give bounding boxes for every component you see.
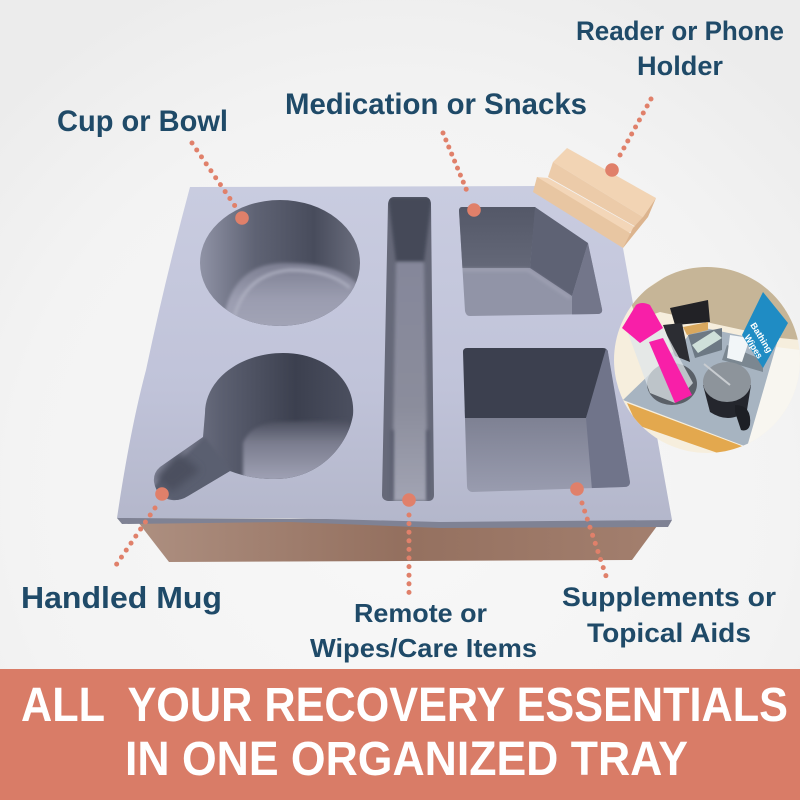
callout: remote or wipes: Wipes/Care Items <box>310 633 537 663</box>
gray organizer tray <box>623 326 777 447</box>
wooden drawer front <box>627 403 742 452</box>
supplements compartment <box>460 345 635 495</box>
callout: remote or wipes: Remote or <box>354 598 487 628</box>
bathing wipes pack <box>742 292 788 368</box>
handled mug compartment <box>154 353 354 500</box>
wooden reader holder <box>533 148 656 248</box>
bathing wipes pack: Bathing <box>748 321 775 354</box>
cup compartment <box>200 200 360 326</box>
callout: medication or snacks: Medication or Snacks <box>285 88 587 121</box>
callout: medication or snacks <box>285 88 587 217</box>
callout: handled mug <box>21 487 222 615</box>
steel mug <box>703 362 751 430</box>
banner <box>0 669 800 800</box>
remote <box>663 323 690 362</box>
tray illustration <box>117 148 672 562</box>
callout: supplements or topical aids: Supplements or <box>562 582 777 612</box>
callout: reader or phone holder: Reader or Phone <box>576 16 784 46</box>
bottle and ointment <box>692 331 722 353</box>
transparent bottle and pink pill box <box>622 303 693 403</box>
callout: cup or bowl <box>57 105 249 225</box>
bathing wipes pack: Wipes <box>742 333 765 360</box>
banner heading <box>21 679 788 786</box>
slot compartment <box>380 195 436 505</box>
wooden tray base <box>138 522 660 562</box>
inset photo of loaded tray <box>614 267 800 460</box>
medication compartment <box>459 207 602 316</box>
callout: cup or bowl: Cup or Bowl <box>57 105 228 138</box>
callout: handled mug: Handled Mug <box>21 580 222 615</box>
callout: supplements or topical aids <box>562 482 777 648</box>
tray top surface <box>117 186 672 522</box>
callout: supplements or topical aids: Topical Aids <box>587 618 751 648</box>
banner heading: IN ONE ORGANIZED TRAY <box>125 733 688 786</box>
callout: reader or phone holder <box>576 16 784 177</box>
tray lip edge <box>117 518 672 528</box>
callout: reader or phone holder: Holder <box>637 51 723 81</box>
callout: remote or wipes <box>310 493 537 663</box>
phone on stand <box>670 300 710 325</box>
